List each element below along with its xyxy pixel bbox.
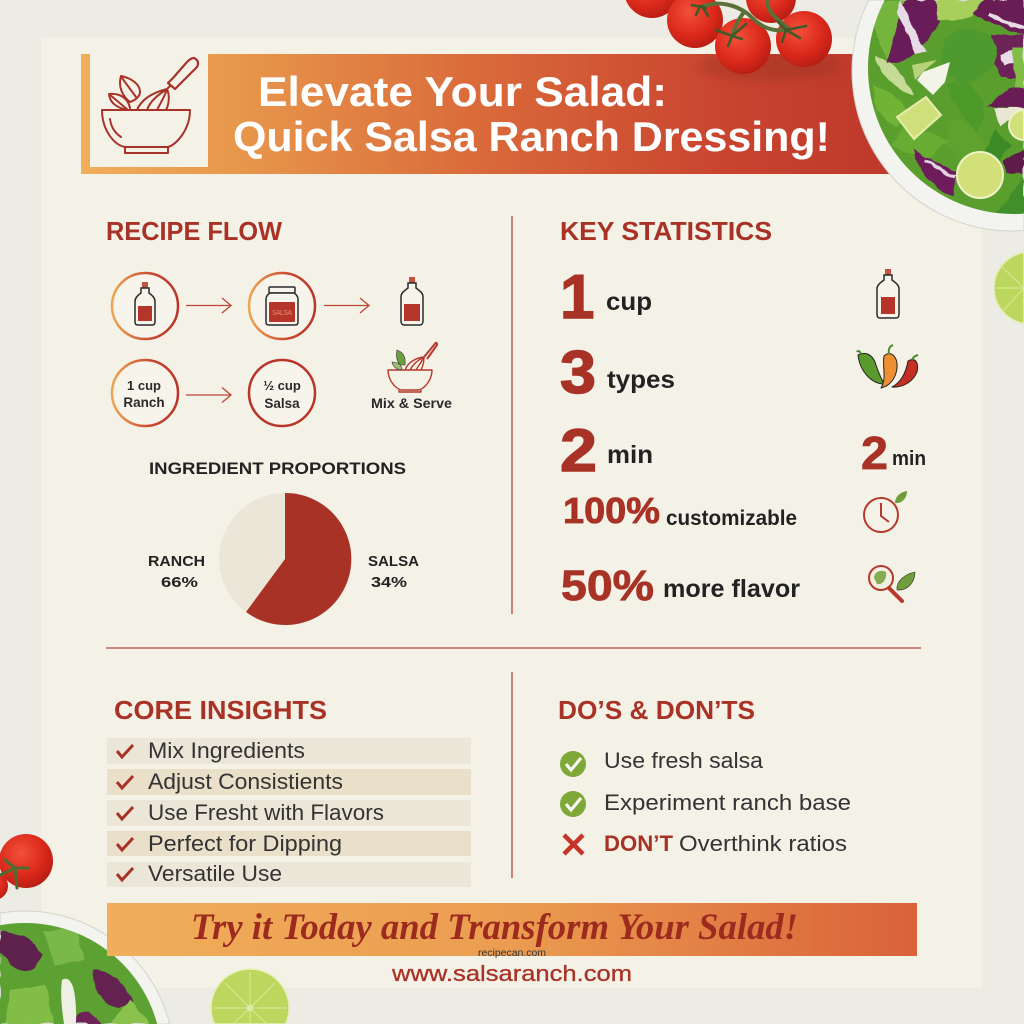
icon: clock with leaf [864, 491, 907, 532]
salad bowl, top right [852, 0, 1024, 231]
ingredient proportions chart [148, 459, 419, 625]
lime slice, bottom [211, 969, 289, 1024]
salad bowl, bottom left [0, 911, 170, 1024]
stat: 2 min side: 2 [861, 427, 888, 479]
arrow [186, 388, 231, 402]
tomatoes on the vine, top [624, 0, 842, 80]
label: salsa [368, 553, 419, 591]
stat: 2 min [560, 417, 653, 484]
stat: 1 cup: cup [606, 288, 652, 316]
flow circle: 1 cup ranch [112, 360, 178, 426]
icon: bottle [877, 269, 899, 318]
stat: 2 min side: min [892, 448, 926, 470]
insight row: versatile use: Versatile Use [148, 861, 282, 886]
arrow [324, 298, 369, 313]
insight row: mix ingredients: Mix Ingredients [148, 738, 305, 763]
stat: 50% more flavor: more flavor [663, 575, 800, 603]
insight row: adjust consistients [107, 769, 471, 795]
panel: do's and don'ts [558, 695, 851, 856]
arrow [186, 298, 231, 313]
call to action banner: Try it Today and Transform Your Salad! [191, 907, 798, 948]
stat: 3 types: types [607, 366, 675, 394]
tomato, left [0, 834, 53, 900]
stat: 100% customizable [563, 490, 797, 531]
label: salsa: SALSA [368, 553, 419, 570]
lime slice, right edge [994, 252, 1024, 324]
stat: 1 cup [560, 263, 652, 332]
stat: 100% customizable: customizable [666, 507, 797, 530]
insight row: adjust consistients: Adjust Consistients [148, 769, 343, 794]
panel: core insights [107, 695, 471, 887]
label: ranch: 66% [161, 574, 198, 591]
stat: 2 min: 2 [560, 417, 597, 484]
stat: 2 min: min [607, 441, 653, 469]
stat: 50% more flavor [561, 562, 800, 610]
panel: key statistics [560, 216, 926, 610]
icon box with mixing bowl and whisk [90, 54, 208, 167]
title banner: Quick Salsa Ranch Dressing! [233, 113, 830, 160]
stat: 50% more flavor: 50% [561, 562, 654, 610]
heading: recipe flow: RECIPE FLOW [106, 216, 282, 246]
icon: mix and serve bowl [388, 343, 437, 392]
don't: overthink ratios: Overthink ratios [679, 831, 847, 856]
label: ranch [148, 553, 205, 591]
insight row: versatile use [107, 861, 471, 887]
heading: do's and don'ts: DO’S & DON’TS [558, 695, 755, 725]
flow circle: salsa jar: SALSA [272, 310, 292, 317]
flow circle: 1 cup ranch: 1 cup [127, 378, 161, 393]
stat: 1 cup: 1 [560, 263, 594, 332]
insight row: use fresht: Use Fresht with Flavors [148, 800, 384, 825]
stat: 3 types [560, 339, 675, 406]
don't: overthink ratios: DON’T [604, 831, 674, 856]
insight row: perfect for dipping: Perfect for Dipping [148, 831, 342, 856]
label: mix and serve: Mix & Serve [371, 395, 452, 411]
watermark: recipecan.com [478, 948, 546, 959]
flow circle: half cup salsa: Salsa [264, 396, 300, 411]
website url: www.salsaranch.com [391, 961, 632, 986]
insight row: use fresht [107, 800, 471, 826]
pie chart [219, 493, 351, 625]
label: ranch: RANCH [148, 553, 205, 570]
flow circle: salsa jar [249, 273, 315, 339]
flow circle: half cup salsa [249, 360, 315, 426]
heading: core insights: CORE INSIGHTS [114, 695, 327, 725]
title banner [81, 54, 890, 174]
chart title: INGREDIENT PROPORTIONS [149, 459, 406, 478]
do: use fresh salsa: Use fresh salsa [604, 748, 764, 773]
label: salsa: 34% [371, 574, 407, 591]
flow circle: half cup salsa: ½ cup [263, 378, 301, 393]
flow circle: 1 cup ranch: Ranch [123, 395, 165, 410]
stat: 2 min side [861, 427, 926, 479]
insight row: mix ingredients [107, 738, 471, 764]
icon: magnifier with leaf [869, 566, 915, 601]
do: experiment ranch base: Experiment ranch base [604, 790, 851, 815]
flow circle: ranch bottle [112, 273, 178, 339]
don't: overthink ratios [564, 831, 847, 856]
heading: key statistics: KEY STATISTICS [560, 216, 772, 246]
do: use fresh salsa [560, 748, 764, 777]
stat: 3 types: 3 [560, 339, 596, 406]
icon: three chili peppers [857, 345, 918, 388]
dividers [106, 216, 921, 878]
stat: 100% customizable: 100% [563, 490, 660, 531]
insight row: perfect for dipping [107, 831, 471, 856]
title text: Elevate Your Salad: [258, 68, 667, 115]
panel: recipe flow [106, 216, 452, 426]
call to action banner [107, 903, 917, 956]
icon: bottle [401, 277, 423, 325]
